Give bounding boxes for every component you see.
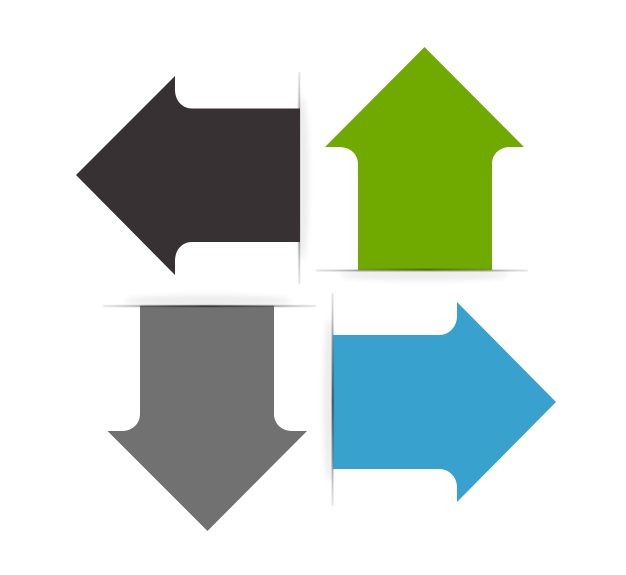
arrow: dark left (76, 72, 309, 284)
arrow: green up (316, 47, 528, 281)
arrow: blue right (323, 293, 556, 506)
arrow: gray down (103, 295, 316, 531)
